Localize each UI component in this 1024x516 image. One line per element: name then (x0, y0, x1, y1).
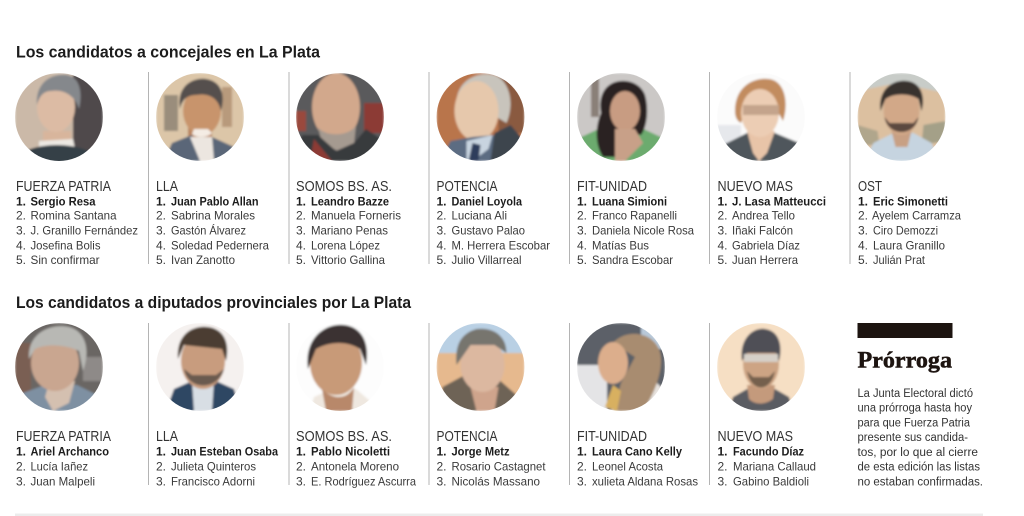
candidate list: Antonela Moreno (311, 460, 399, 474)
callout body text: presente sus candida- (858, 432, 968, 444)
candidate list: 2. (858, 208, 868, 222)
candidate list: 2. (156, 460, 166, 474)
candidate list: Sabrina Morales (171, 208, 255, 222)
candidate list: 2. (577, 460, 587, 474)
candidate list: 2. (296, 460, 306, 474)
portrait: Eric Simonetti (858, 73, 946, 161)
party name: FUERZA PATRIA (16, 429, 111, 445)
candidate list: 4. (16, 238, 26, 252)
candidate list: 3. (718, 474, 728, 488)
candidate list: 1. (296, 444, 306, 458)
party name: FIT-UNIDAD (577, 179, 647, 195)
portrait: Jorge Metz (436, 323, 524, 411)
candidate list: Facundo Díaz (733, 444, 804, 458)
portrait: Sergio Resa (15, 73, 103, 161)
party name: POTENCIA (436, 429, 498, 445)
candidate list (156, 194, 269, 267)
candidate list (436, 444, 546, 488)
candidate list: Leandro Bazze (311, 194, 389, 208)
candidate list: 5. (156, 253, 166, 267)
candidate list: 2. (718, 460, 728, 474)
candidate list: 3. (436, 224, 447, 238)
panel: Potencia concejales (436, 73, 550, 267)
candidate list: Rosario Castagnet (452, 460, 546, 474)
candidate list: 1. (156, 444, 166, 458)
candidate list: Lucía Iañez (30, 460, 88, 474)
party name: NUEVO MAS (718, 429, 793, 445)
panel: Fuerza Patria concejales (15, 73, 138, 267)
candidate list: Iñaki Falcón (732, 224, 793, 238)
candidate list: 3. (858, 224, 868, 238)
candidate list: Julio Villarreal (452, 253, 522, 267)
portrait: Facundo Díaz (717, 323, 805, 411)
callout body text: La Junta Electoral dictó (858, 388, 973, 400)
panel: Nuevo MAS concejales (717, 73, 826, 267)
portrait: J. Lasa Matteucci (718, 77, 798, 161)
panel: OST concejales (858, 73, 961, 267)
candidate list: Daniel Loyola (452, 194, 522, 208)
candidate list: Mariano Penas (311, 224, 388, 238)
candidate list: 5. (296, 253, 306, 267)
candidate list: 2. (436, 460, 447, 474)
party name: FUERZA PATRIA (16, 179, 111, 195)
candidate list: M. Herrera Escobar (452, 238, 550, 252)
callout body text: de esta edición las listas (858, 462, 980, 474)
candidate list: 1. (718, 444, 728, 458)
candidate list: 4. (858, 238, 868, 252)
heading: concejales: Los candidatos a concejales en La Plata (16, 44, 321, 62)
candidate list: 3. (718, 224, 728, 238)
section: concejales (15, 44, 961, 267)
portrait: Leandro Bazze (296, 73, 384, 161)
callout body text (858, 388, 983, 488)
candidate list: 2. (296, 208, 306, 222)
candidate list: Francisco Adorni (171, 474, 255, 488)
candidate list (296, 444, 416, 488)
panel: LLA concejales (156, 73, 269, 267)
candidate list: 1. (718, 194, 728, 208)
section: diputados provinciales (15, 294, 983, 488)
candidate list: 5. (436, 253, 447, 267)
callout body text: no estaban confirmadas. (858, 476, 983, 488)
candidate list: 1. (156, 194, 166, 208)
candidate list: Matías Bus (592, 238, 649, 252)
portrait: Juan Esteban Osaba (156, 323, 244, 411)
candidate list: 4. (718, 238, 728, 252)
candidate list: J. Lasa Matteucci (732, 194, 826, 208)
candidate list: Laura Cano Kelly (592, 444, 682, 458)
party name: POTENCIA (436, 179, 498, 195)
portrait: Laura Cano Kelly (577, 323, 665, 411)
candidate list: 3. (156, 474, 166, 488)
party name: FIT-UNIDAD (577, 429, 647, 445)
candidate list: 1. (577, 444, 587, 458)
candidate list (436, 194, 550, 267)
candidate list: 3. (577, 474, 587, 488)
callout body text: para que Fuerza Patria (858, 418, 971, 430)
candidate list: 3. (156, 224, 166, 238)
candidate list: 3. (16, 224, 26, 238)
candidate list: 1. (436, 444, 447, 458)
candidate list: Ariel Archanco (30, 444, 109, 458)
panel: Nuevo MAS diputados (717, 323, 816, 488)
candidate list: Laura Granillo (873, 238, 945, 252)
candidate list: Gabino Baldioli (733, 474, 809, 488)
candidate list: J. Granillo Fernández (30, 224, 138, 238)
party name: OST (858, 179, 882, 195)
candidate list (156, 444, 278, 488)
candidate list (858, 194, 961, 267)
candidate list: E. Rodríguez Ascurra (311, 474, 416, 488)
candidate list (577, 194, 694, 267)
candidate list: Sin confirmar (30, 253, 100, 267)
party name: SOMOS BS. AS. (296, 429, 392, 445)
candidate list: 1. (296, 194, 306, 208)
candidate list: Sergio Resa (30, 194, 96, 208)
candidate list: Leonel Acosta (592, 460, 663, 474)
party name: NUEVO MAS (718, 179, 793, 195)
candidate list: 3. (16, 474, 26, 488)
callout body text: una prórroga hasta hoy (858, 402, 972, 414)
candidate list: Gabriela Díaz (732, 238, 800, 252)
candidate list: 4. (156, 238, 166, 252)
candidate list: Franco Rapanelli (592, 208, 677, 222)
party name: LLA (156, 179, 178, 195)
candidate list: Nicolás Massano (452, 474, 540, 488)
candidate list: 5. (16, 253, 26, 267)
candidate list: Ayelem Carramza (872, 208, 961, 222)
candidate list: Juan Malpeli (30, 474, 95, 488)
candidate list: 3. (296, 474, 306, 488)
candidate list: 2. (436, 208, 447, 222)
candidate list: 1. (16, 444, 26, 458)
candidate list: Juan Herrera (732, 253, 798, 267)
panel: FIT-Unidad diputados (577, 323, 698, 488)
black bar (858, 323, 952, 338)
candidate list: 1. (436, 194, 447, 208)
candidate list (577, 444, 698, 488)
candidate list: Mariana Callaud (733, 460, 816, 474)
candidate list: Manuela Forneris (311, 208, 401, 222)
candidate list: 2. (156, 208, 166, 222)
candidate list: 5. (718, 253, 728, 267)
candidate list: 2. (718, 208, 728, 222)
panel: Prórroga callout (858, 323, 983, 488)
panel: LLA diputados (156, 323, 278, 488)
candidate list: Ciro Demozzi (873, 224, 938, 238)
candidate list: Pablo Nicoletti (311, 444, 390, 458)
portrait: Juan Pablo Allan (156, 73, 244, 161)
panel: Somos Bs. As. diputados (296, 323, 416, 488)
party name: LLA (156, 429, 178, 445)
candidate list: 2. (577, 208, 587, 222)
candidate list: Sandra Escobar (592, 253, 673, 267)
candidate list: 1. (577, 194, 587, 208)
callout body text: tos, por lo que al cierre (858, 447, 978, 459)
candidate list: 1. (16, 194, 26, 208)
candidate list: 3. (296, 224, 306, 238)
portrait: Ariel Archanco (15, 323, 103, 411)
panel: Potencia diputados (436, 323, 546, 488)
candidate list: Andrea Tello (732, 208, 795, 222)
candidate list: Daniela Nicole Rosa (592, 224, 694, 238)
candidate list (718, 194, 826, 267)
candidate list: 3. (436, 474, 447, 488)
candidate list: Gustavo Palao (452, 224, 525, 238)
candidate list: 5. (577, 253, 587, 267)
candidate list: Julián Prat (873, 253, 926, 267)
portrait: Luana Simioni (577, 73, 665, 161)
candidate list: Vittorio Gallina (311, 253, 385, 267)
heading: diputados: Los candidatos a diputados provinciales por La Plata (16, 294, 412, 312)
candidate list (16, 194, 138, 267)
candidate list: xulieta Aldana Rosas (592, 474, 698, 488)
candidate list (718, 444, 816, 488)
candidate list: 3. (577, 224, 587, 238)
party name: SOMOS BS. AS. (296, 179, 392, 195)
panel: FIT-Unidad concejales (577, 73, 694, 267)
callout heading: Prórroga (858, 348, 953, 372)
candidate list: 2. (16, 208, 26, 222)
candidate list: 4. (436, 238, 447, 252)
candidate list: Soledad Pedernera (171, 238, 269, 252)
candidate list: Luana Simioni (592, 194, 667, 208)
candidate list: Josefina Bolis (30, 238, 100, 252)
candidate list: Jorge Metz (452, 444, 510, 458)
candidate list (296, 194, 401, 267)
candidate list: Gastón Álvarez (171, 222, 246, 238)
candidate list: Luciana Ali (452, 208, 507, 222)
candidate list: Ivan Zanotto (171, 253, 235, 267)
candidate list: Lorena López (311, 238, 380, 252)
panel: Somos Bs. As. concejales (296, 73, 401, 267)
candidate list: Juan Esteban Osaba (171, 444, 278, 458)
candidate list: 2. (16, 460, 26, 474)
portrait: Daniel Loyola (436, 73, 524, 161)
panel: Fuerza Patria diputados (15, 323, 111, 488)
candidate list: Romina Santana (30, 208, 117, 222)
candidate list: Julieta Quinteros (171, 460, 256, 474)
candidate list: 4. (577, 238, 587, 252)
candidate list (16, 444, 109, 488)
candidate list: Eric Simonetti (873, 194, 948, 208)
candidate list: 4. (296, 238, 306, 252)
candidate list: Juan Pablo Allan (171, 194, 258, 208)
candidate list: 1. (858, 194, 868, 208)
portrait: Pablo Nicoletti (306, 323, 369, 411)
candidate list: 5. (858, 253, 868, 267)
